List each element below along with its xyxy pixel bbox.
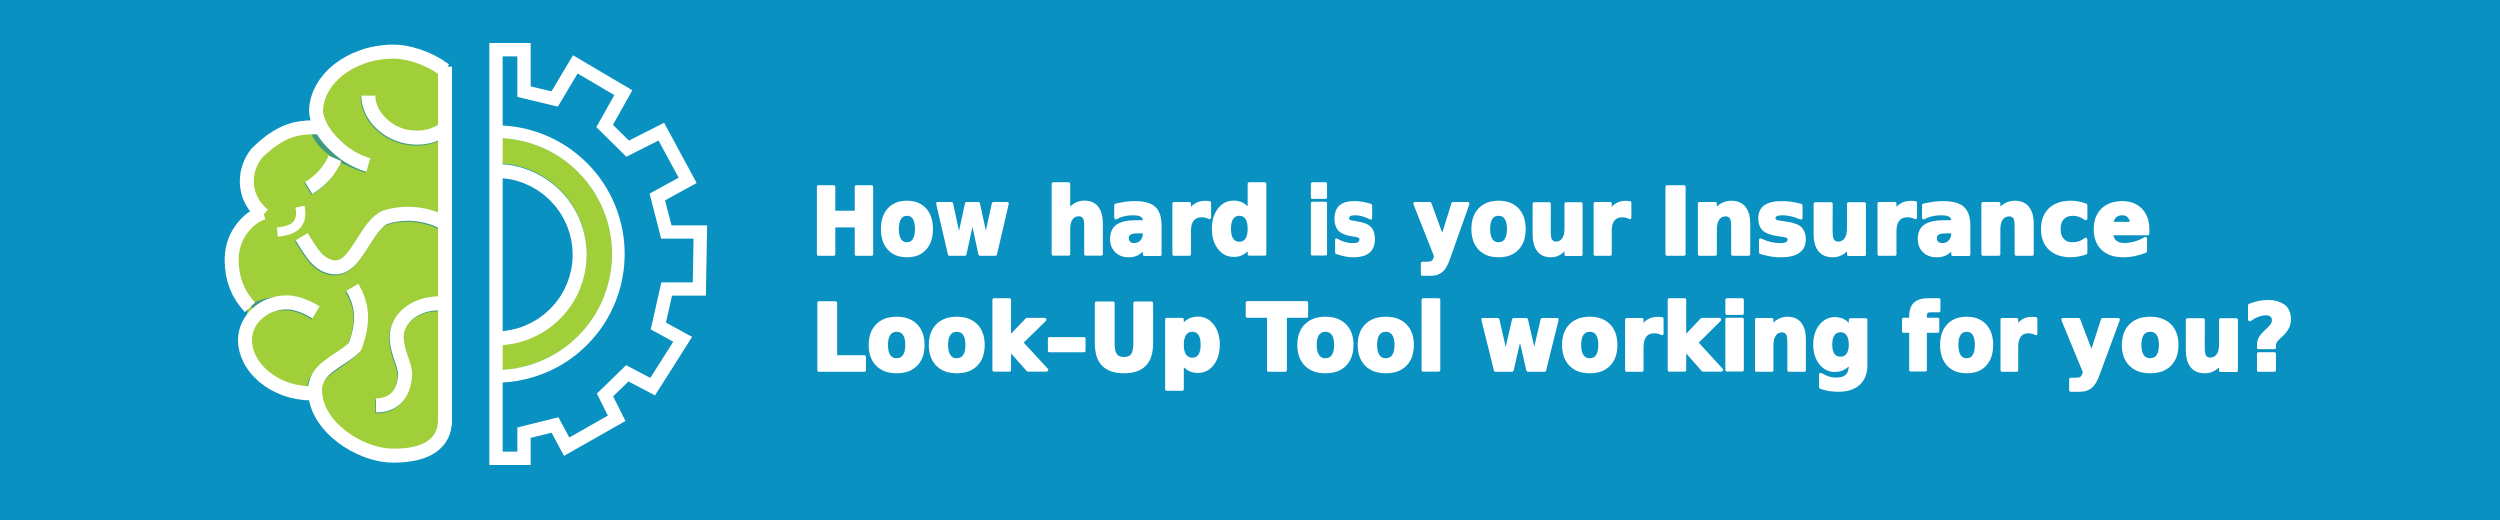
heading line 1: Insurance: [1659, 169, 2152, 276]
brain teal fold shadows: [254, 97, 444, 406]
heading line 1: hard: [1046, 169, 1272, 276]
heading line 1: is: [1306, 169, 1377, 276]
heading line 2: [811, 285, 2295, 392]
heading line 2: Look–Up: [811, 285, 1222, 392]
gear green ring: [496, 151, 599, 357]
heading line 2: Tool: [1247, 285, 1446, 392]
heading line 2: for: [1902, 285, 2037, 392]
heading line 1: How: [811, 169, 1010, 276]
gear outline: [496, 50, 700, 458]
heading line 1: [811, 169, 2152, 276]
brain white outline and folds: [232, 52, 445, 456]
heading: [811, 169, 2295, 392]
gear inner white ring: [496, 171, 580, 338]
icon: brain half: [232, 52, 445, 456]
heading line 2: you?: [2062, 285, 2295, 392]
gear outer white ring: [496, 132, 618, 376]
brain green fill: [232, 52, 445, 456]
heading line 2: working: [1480, 285, 1873, 392]
icon: gear half: [496, 50, 700, 458]
heading line 1: your: [1414, 169, 1631, 276]
